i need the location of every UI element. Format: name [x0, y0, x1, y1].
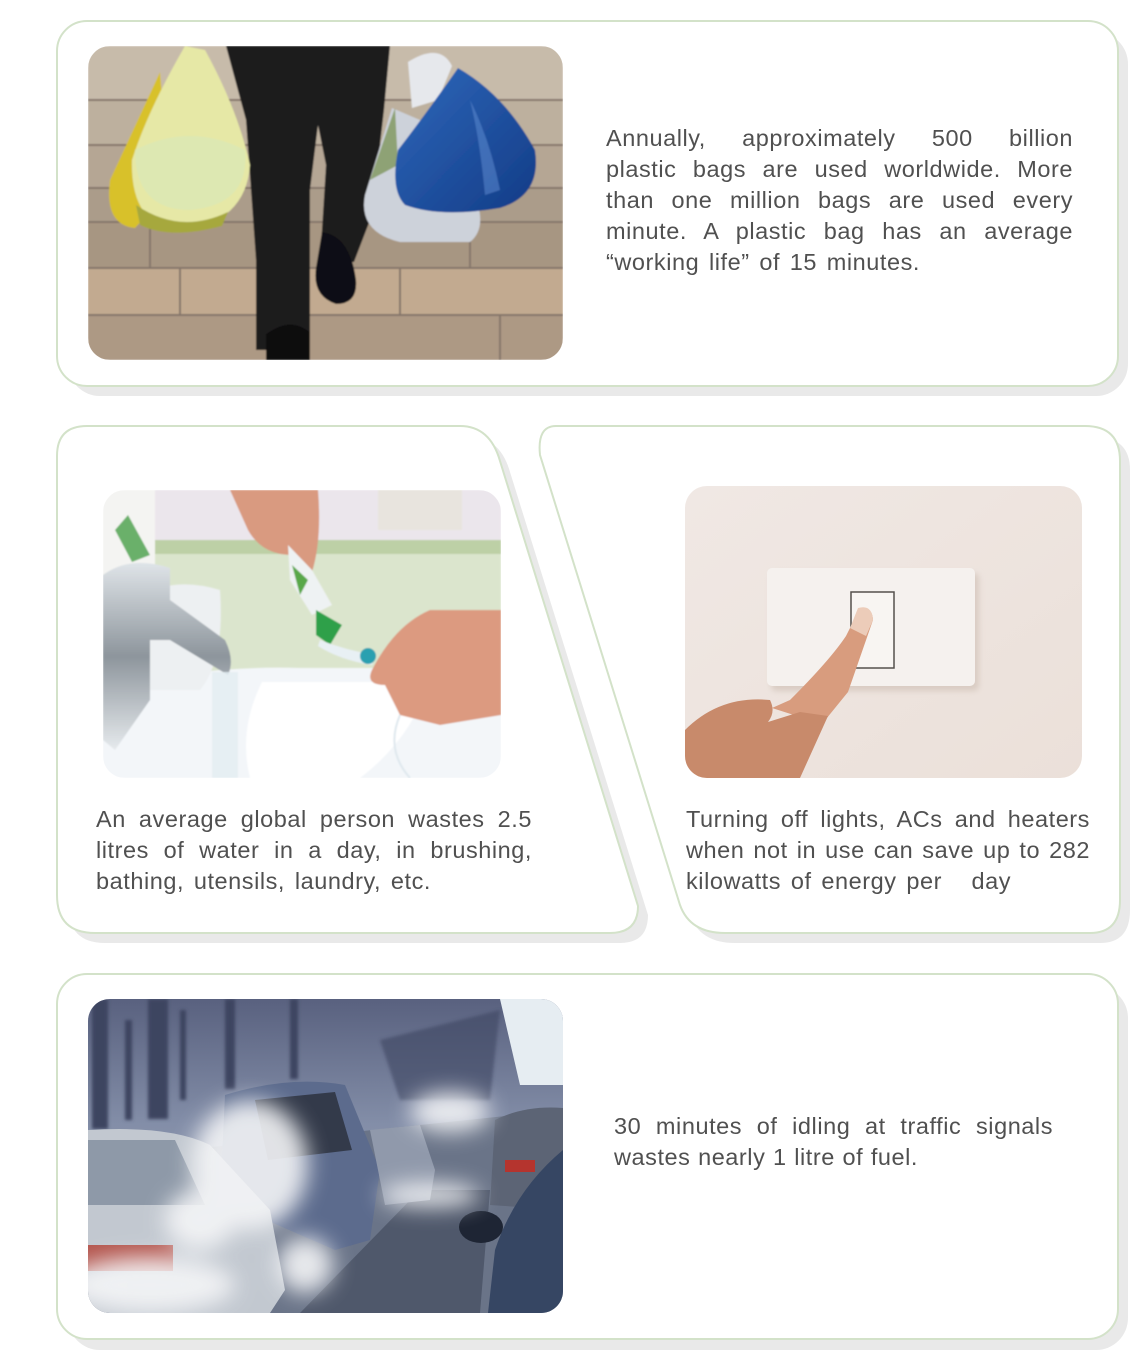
- text: energy saving fact: kilowatts of energy per day: [686, 868, 1011, 894]
- panel: water wastage card: [57, 426, 648, 943]
- photo: cars idling in exhaust-filled traffic: [65, 999, 563, 1313]
- text: energy saving fact: [686, 806, 1090, 894]
- text: plastic bags fact: minute. A plastic bag has an average: [606, 218, 1073, 244]
- text: plastic bags fact: than one million bags are used every: [606, 187, 1073, 213]
- text: water wastage fact: [96, 806, 532, 894]
- text: fuel idling fact: 30 minutes of idling at traffic signals: [614, 1113, 1053, 1139]
- text: plastic bags fact: “working life” of 15 minutes.: [606, 249, 920, 275]
- text: fuel idling fact: wastes nearly 1 litre of fuel.: [614, 1144, 918, 1170]
- panel: energy saving card: [540, 426, 1130, 943]
- text: plastic bags fact: Annually, approximately 500 billion: [606, 125, 1073, 151]
- text: fuel idling fact: [614, 1113, 1053, 1170]
- photo: shopper carrying plastic bags on stairs: [88, 46, 563, 360]
- photo: brushing teeth at a running tap: [103, 490, 501, 778]
- text: water wastage fact: bathing, utensils, laundry, etc.: [96, 868, 431, 894]
- text: plastic bags fact: plastic bags are used worldwide. More: [606, 156, 1073, 182]
- text: energy saving fact: Turning off lights, ACs and heaters: [686, 806, 1090, 832]
- photo: finger pressing a light switch: [685, 486, 1082, 778]
- text: energy saving fact: when not in use can save up to 282: [686, 837, 1090, 863]
- panel: plastic bags card: [57, 21, 1128, 396]
- panel: fuel idling card: [57, 974, 1128, 1350]
- text: plastic bags fact: [606, 125, 1073, 275]
- text: water wastage fact: An average global person wastes 2.5: [96, 806, 532, 832]
- text: water wastage fact: litres of water in a day, in brushing,: [96, 837, 532, 863]
